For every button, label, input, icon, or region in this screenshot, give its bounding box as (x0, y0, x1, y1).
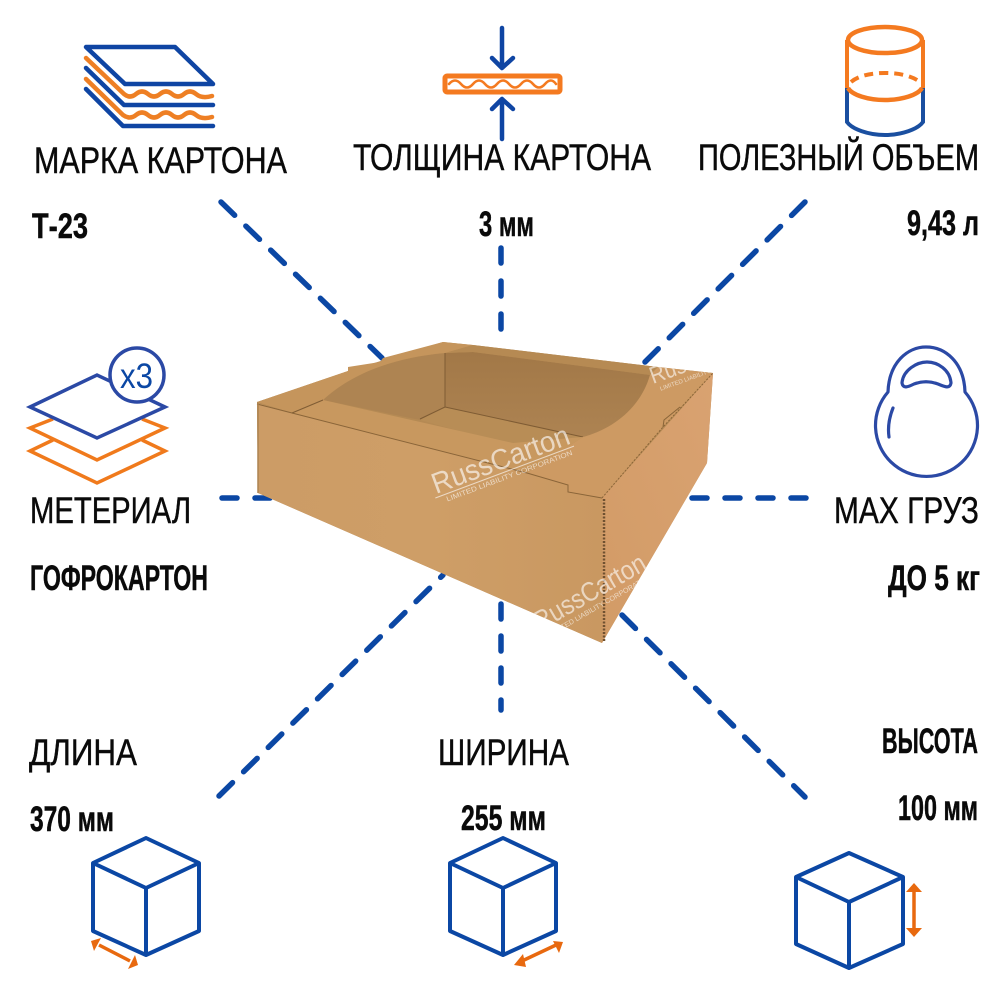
heading: МАРКА КАРТОНА (34, 140, 287, 181)
connector: thickness (498, 248, 504, 340)
box interior floor (420, 407, 583, 446)
connector: width (498, 604, 504, 710)
watermark: LIMITED LIABILITY CORPORATION (446, 450, 574, 503)
panel: useful volume (698, 27, 979, 243)
box right flap (527, 367, 713, 498)
icon: cylinder (847, 27, 923, 135)
connector: material (222, 495, 270, 501)
box left rear flap (257, 342, 473, 413)
connector: volume (645, 202, 805, 362)
value: 370 мм (30, 800, 114, 839)
box interior back wall (445, 352, 650, 437)
panel: cardboard grade (32, 47, 287, 246)
box right face (602, 373, 713, 643)
value: 3 мм (479, 205, 534, 244)
panel: max load (834, 347, 980, 598)
connector: max load (692, 495, 806, 501)
icon: three sheets: x3 (120, 357, 153, 396)
icon: corrugated layers (86, 47, 213, 126)
icon: three sheets (30, 348, 165, 483)
heading: МЕТЕРИАЛ (30, 490, 191, 531)
box front face (257, 403, 602, 643)
panel: length (29, 732, 199, 969)
watermark: lower corner (534, 558, 646, 628)
connector: length (219, 575, 443, 796)
connector: brand (221, 202, 382, 358)
heading: ДЛИНА (29, 732, 137, 773)
heading: ТОЛЩИНА КАРТОНА (353, 137, 651, 178)
watermark: RussCarton (427, 420, 574, 501)
icon: cube with length arrow (91, 838, 199, 969)
value: Т-23 (32, 207, 88, 246)
watermark: lower corner: RussCarton (528, 548, 651, 636)
panel: height (796, 722, 978, 968)
watermark: upper corner: RussCarton (646, 327, 758, 390)
box silhouette (257, 342, 713, 643)
panel: width (438, 732, 569, 967)
panel: material (30, 348, 208, 598)
connector: height (622, 615, 805, 797)
value: ГОФРОКАРТОН (30, 559, 208, 598)
watermark: upper corner: LIMITED LIABILITY CORPORATION (659, 353, 755, 393)
value: 255 мм (461, 799, 546, 838)
icon: cube with height arrow (796, 853, 922, 968)
box interior left wall (323, 353, 445, 420)
panel: cardboard thickness (353, 28, 651, 244)
watermark: lower corner: LIMITED LIABILITY CORPORATION (548, 573, 653, 638)
icon: thickness arrows (445, 28, 560, 139)
heading: ШИРИНА (438, 732, 569, 773)
box back rim (445, 345, 658, 375)
icon: cube with width arrow (450, 838, 563, 967)
watermark: upper corner (649, 366, 710, 391)
box front inner flap (292, 400, 583, 473)
icon: kettlebell (876, 347, 978, 476)
cardboard box illustration (256, 342, 713, 643)
